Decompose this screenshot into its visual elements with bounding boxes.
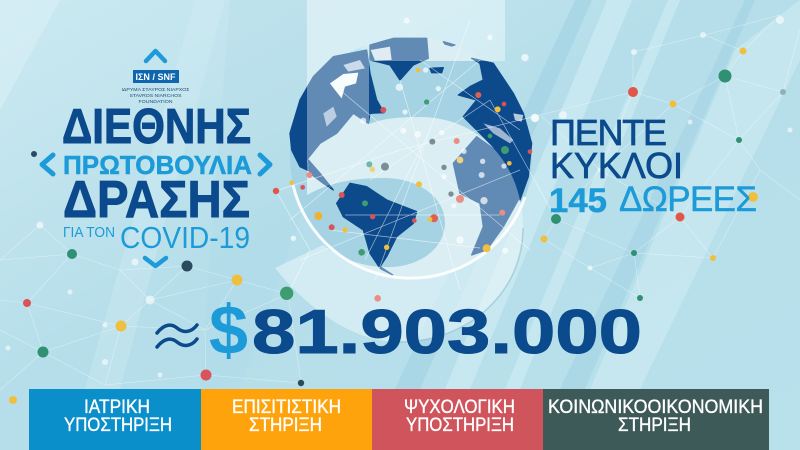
number 5 soft base xyxy=(275,0,523,342)
globe rim xyxy=(293,185,525,278)
dollar sign: $ xyxy=(209,291,248,369)
right chevron xyxy=(260,155,270,174)
foundation name: STAVROS NIARCHOS xyxy=(130,93,182,99)
bar: psychological: ΨΥΧΟΛΟΓΙΚΗ xyxy=(404,397,515,418)
globe network dots xyxy=(280,18,539,302)
right stats: ΔΩΡΕΕΣ xyxy=(619,180,757,219)
total amount xyxy=(157,291,642,369)
bar: medical: ΙΑΤΡΙΚΗ xyxy=(84,397,150,418)
bar: medical: ΥΠΟΣΤΗΡΙΞΗ xyxy=(64,415,172,436)
bar: nutrition xyxy=(201,389,372,450)
bottom chevron xyxy=(145,258,166,266)
bar: psychological: ΥΠΟΣΤΗΡΙΞΗ xyxy=(406,415,514,436)
foundation name: FOUNDATION xyxy=(138,99,173,105)
foundation name: ΙΔΡΥΜΑ ΣΤΑΥΡΟΣ ΝΙΑΡΧΟΣ xyxy=(122,87,190,93)
bar: socioeconomic: ΚΟΙΝΩΝΙΚΟΟΙΚΟΝΟΜΙΚΗ xyxy=(548,397,763,418)
logo top chevron xyxy=(146,51,165,61)
logo block xyxy=(122,51,190,105)
globe network lines xyxy=(276,20,556,294)
category bars xyxy=(29,389,769,450)
subtitle small: ΓΙΑ ΤΟΝ xyxy=(63,225,115,241)
approx symbol xyxy=(157,325,197,347)
title line 2: ΠΡΩΤΟΒΟΥΛΙΑ xyxy=(63,150,252,180)
left chevron xyxy=(42,155,53,174)
bar: psychological xyxy=(372,389,543,450)
foundation name xyxy=(122,87,190,105)
bar: socioeconomic xyxy=(543,389,769,450)
subtitle covid: COVID-19 xyxy=(120,221,250,255)
title line 1: ΔΙΕΘΝΗΣ xyxy=(62,100,251,154)
title block xyxy=(42,100,270,266)
title line 3: ΔΡΑΣΗΣ xyxy=(63,171,250,229)
bar: socioeconomic: ΣΤΗΡΙΞΗ xyxy=(618,415,691,436)
atmospheric glare xyxy=(350,46,372,72)
bar: medical xyxy=(29,389,201,450)
bar: nutrition: ΣΤΗΡΙΞΗ xyxy=(249,415,322,436)
five cycles: ΠΕΝΤΕ xyxy=(550,112,667,153)
number 5 bowl shadow xyxy=(400,228,523,342)
donations count: 145 xyxy=(549,182,607,220)
ocean under the 5 xyxy=(307,36,521,276)
right stats xyxy=(549,112,757,220)
right stats: ΚΥΚΛΟΙ xyxy=(550,145,683,186)
globe and continents xyxy=(289,38,532,276)
bar: nutrition: ΕΠΙΣΙΤΙΣΤΙΚΗ xyxy=(232,397,341,418)
polar and coastal highlights xyxy=(323,47,523,143)
foundation logo badge: ΙΣΝ / SNF xyxy=(136,72,176,82)
continents xyxy=(290,38,532,275)
amount value: 81.903.000 xyxy=(252,298,642,367)
large translucent number 5 xyxy=(275,0,523,342)
